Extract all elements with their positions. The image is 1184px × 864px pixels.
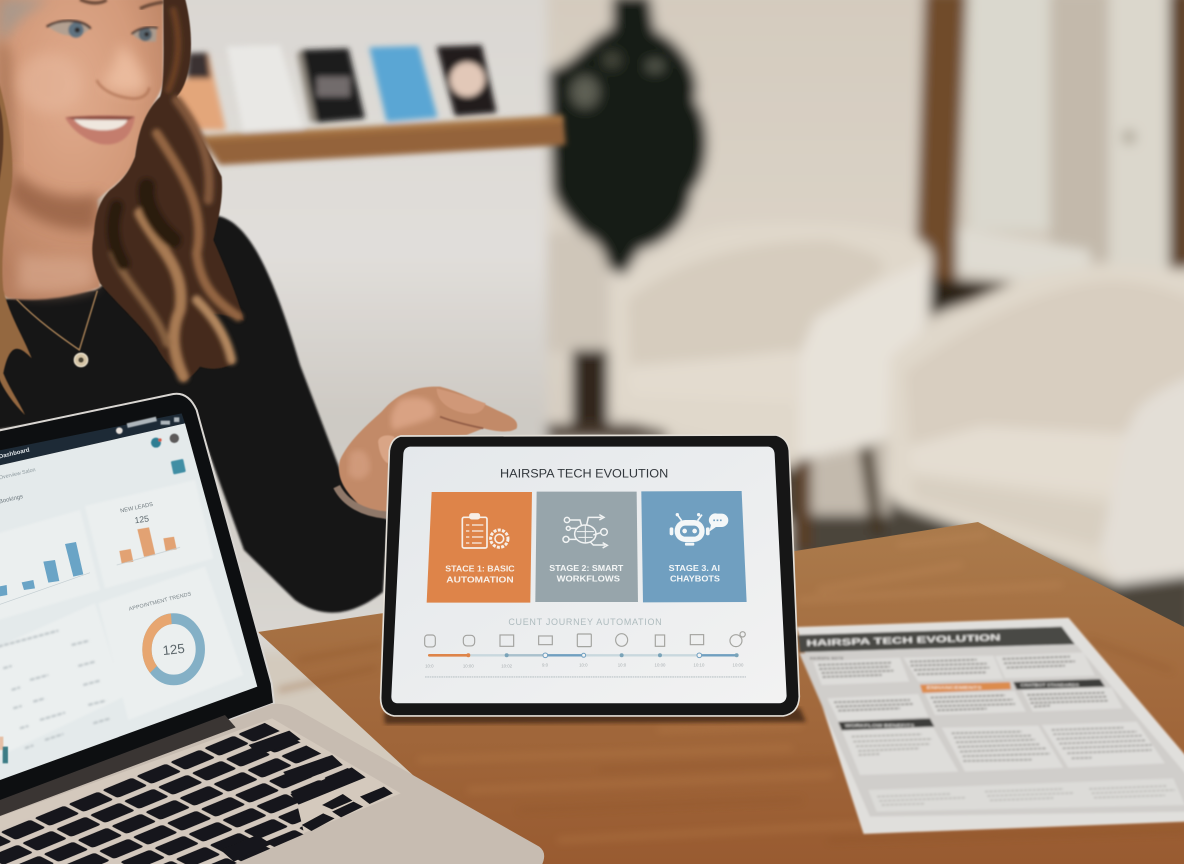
hinge — [0, 715, 236, 817]
timeline labels: 9:0 — [542, 663, 549, 668]
icon: chatbot — [670, 513, 728, 546]
neck highlight — [17, 253, 95, 294]
bar chart: blue — [0, 542, 90, 605]
book: dark with circle — [437, 45, 497, 116]
left cheek shade — [0, 40, 17, 187]
eye: left — [47, 21, 91, 38]
orange section bar — [920, 682, 1011, 693]
table — [258, 522, 1184, 864]
icon: clipboard and gear — [462, 514, 508, 548]
window panel — [970, 0, 1053, 230]
shelf with books — [175, 45, 566, 165]
header labels — [0, 447, 36, 505]
donut chart: appointments: APPOINTMENT TRENDS — [128, 591, 192, 613]
necklace — [17, 291, 97, 367]
dark section bar left — [838, 718, 934, 730]
top status icons — [116, 417, 186, 474]
book: blue — [369, 46, 438, 122]
chair: right armchair — [886, 266, 1184, 585]
top status bar — [0, 413, 185, 466]
timeline labels: 10:00 — [733, 663, 744, 668]
label: STAGE 2: SMART — [549, 563, 624, 573]
laptop lid — [0, 394, 274, 810]
text panels — [813, 652, 1184, 812]
keyboard well — [0, 718, 401, 864]
wide keys — [221, 731, 393, 862]
label: CHAYBOTS — [670, 574, 720, 584]
tablet shadow — [384, 708, 806, 724]
chin and neck shadow — [8, 170, 100, 231]
timeline labels: 10:0 — [579, 663, 588, 668]
timeline labels: 10:00 — [655, 663, 666, 668]
dashboard cards — [0, 480, 243, 757]
bar chart: new leads: NEW LEADS — [120, 502, 154, 515]
label: STAGE 3. AI — [669, 563, 720, 573]
nose — [97, 43, 149, 99]
wall: left white partition — [150, 0, 547, 650]
timeline labels: 10:02 — [501, 663, 513, 668]
label — [669, 563, 720, 584]
door frame: wood — [916, 0, 1012, 314]
hand resting on tablet — [337, 387, 517, 515]
title: HAIRSPA TECH EVOLUTION — [500, 466, 668, 480]
tablet — [381, 435, 799, 716]
wall: beige back wall — [547, 0, 927, 550]
timeline labels: 10:0 — [425, 663, 434, 668]
sheet background — [799, 645, 1184, 817]
forehead shade — [0, 0, 50, 43]
chair: left armchair — [612, 223, 932, 550]
label — [549, 563, 624, 584]
header band — [798, 627, 1075, 652]
title: HAIRSPA TECH EVOLUTION — [806, 632, 1001, 648]
timeline labels: 10:00 — [463, 663, 474, 668]
tablet screen — [391, 447, 787, 703]
sheet — [797, 618, 1184, 833]
card: stage 1 — [427, 492, 532, 603]
eyebrows — [80, 0, 163, 9]
orange section bar: ENHANCEMENTS — [927, 685, 982, 690]
window bench — [958, 228, 1090, 280]
timeline labels: 10:0 — [618, 663, 627, 668]
woman: face and neck — [0, 0, 163, 300]
label — [445, 564, 515, 584]
woman: wavy hair — [0, 0, 244, 415]
door frame right — [1169, 0, 1184, 268]
book: orange — [175, 53, 226, 130]
bracelet — [337, 487, 387, 515]
floor — [608, 440, 1184, 660]
dark section bar left: WORKFLOW BENEFITS — [845, 723, 914, 728]
timeline track — [429, 653, 739, 658]
woman: sweater — [0, 216, 388, 613]
pedestal beside chair — [547, 232, 608, 352]
timeline icons — [425, 632, 745, 647]
subtitle: CUENT JOURNEY AUTOMATION — [508, 617, 662, 627]
screen edge thumbnail — [0, 737, 8, 763]
printed handout — [797, 618, 1184, 833]
donut chart: appointments: 125 — [162, 641, 186, 658]
timeline labels: 10:10 — [694, 663, 705, 668]
table rows — [0, 631, 111, 748]
door: white — [1109, 0, 1171, 270]
timeline labels — [425, 663, 744, 668]
hair highlights — [113, 10, 238, 377]
card: stage 3 — [641, 491, 747, 602]
mouth — [65, 115, 135, 145]
dark post — [572, 350, 608, 436]
laptop screen with dashboard — [0, 394, 274, 810]
left hair strands — [0, 80, 32, 415]
bar chart: new leads — [117, 502, 180, 565]
label: AUTOMATION — [446, 574, 514, 584]
bar chart: new leads: 125 — [134, 513, 150, 525]
wood grain — [280, 535, 1184, 840]
dark section bar right: CHATBOT STANDARDS — [1021, 682, 1079, 687]
icon: potted plant — [548, 0, 707, 275]
dashboard screen — [0, 423, 257, 781]
tablet body — [381, 435, 799, 716]
card: stage 2 — [535, 492, 638, 602]
shelf board — [200, 115, 566, 165]
icon: brain network — [563, 515, 607, 548]
book: dark — [302, 48, 365, 123]
laptop base and keyboard — [0, 704, 544, 864]
aluminium deck — [0, 704, 544, 864]
paragraph lines — [818, 657, 1175, 805]
label: STACE 1: BASIC — [445, 564, 515, 574]
small heading: HAIRSPA NOTE — [810, 656, 844, 660]
timeline caption line — [425, 675, 746, 679]
label: WORKFLOWS — [557, 574, 620, 584]
donut chart: appointments — [128, 591, 211, 693]
eye: right — [132, 27, 158, 42]
dark section bar right — [1013, 679, 1105, 690]
keys — [0, 723, 365, 864]
cheek highlight — [18, 53, 82, 113]
book: white — [227, 45, 303, 132]
